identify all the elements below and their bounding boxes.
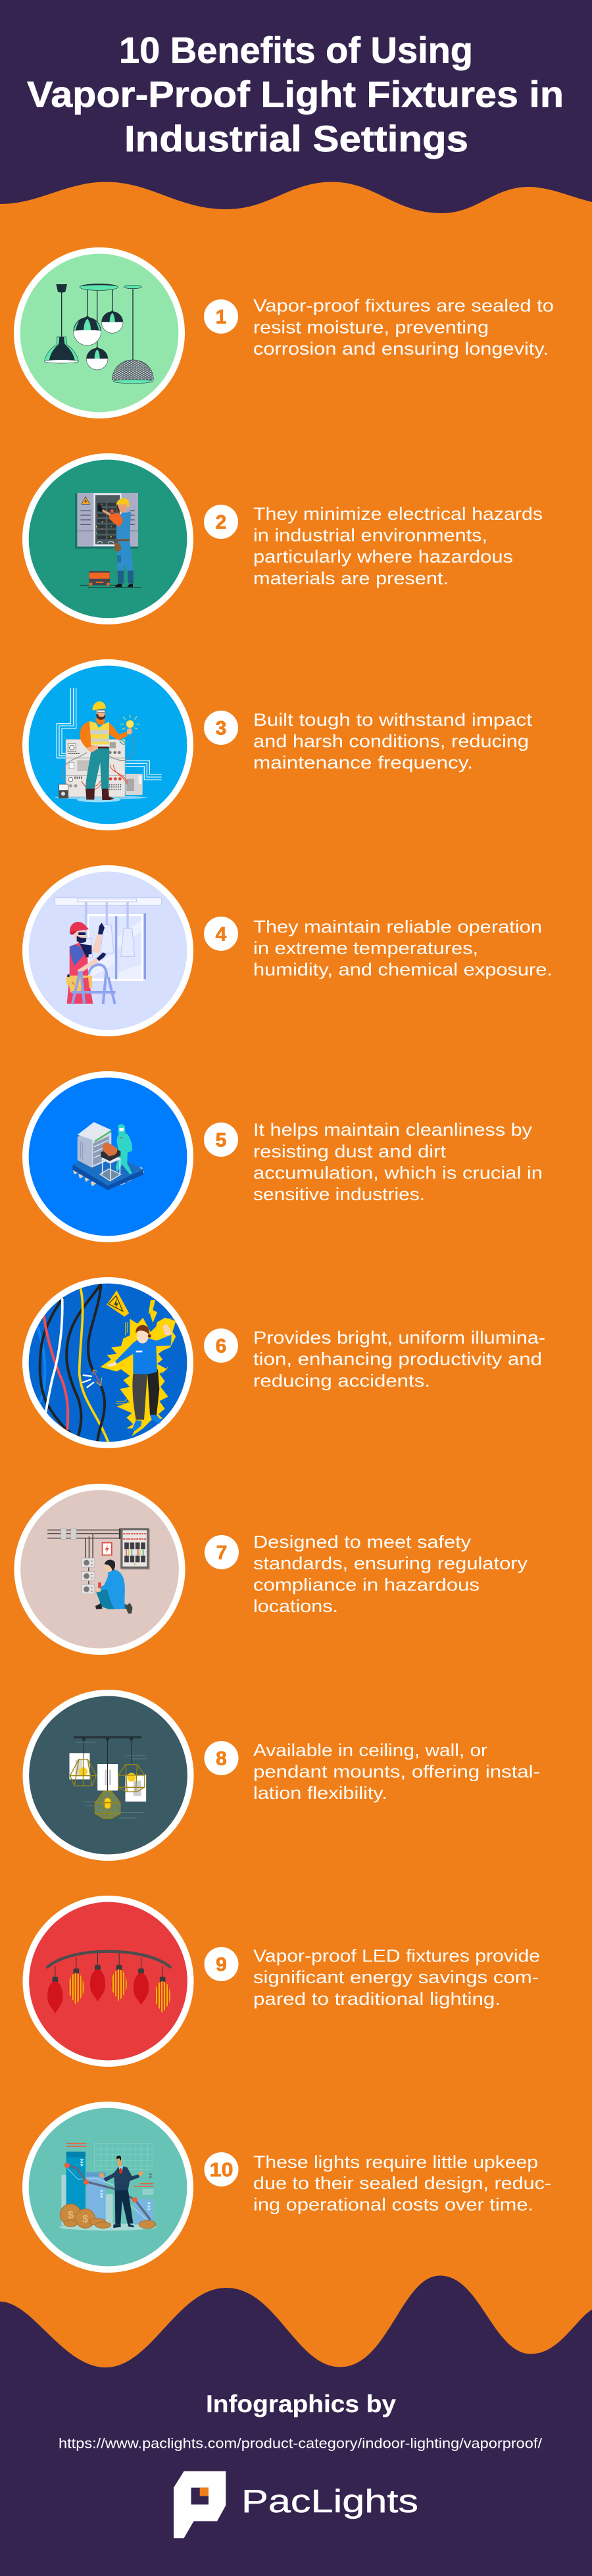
benefit text 3: maintenance frequency. — [253, 753, 473, 772]
number badge 5: 5 — [216, 1129, 226, 1151]
icon: engineer with light bulb and control cabinets — [22, 659, 193, 830]
benefit text 1: resist moisture, preventing — [253, 317, 489, 337]
benefit text 5: accumulation, which is crucial in — [253, 1163, 543, 1182]
benefit text 2: materials are present. — [253, 568, 449, 588]
panel: benefit 3 — [22, 659, 533, 830]
number badge 6: 6 — [216, 1336, 226, 1357]
benefit text 7: compliance in hazardous — [253, 1575, 480, 1595]
benefit text 8: lation flexibility. — [253, 1783, 387, 1803]
benefit text 4: They maintain reliable operation — [253, 917, 542, 936]
footer wave band — [0, 2275, 592, 2576]
title: 10 Benefits of Using — [119, 29, 473, 71]
icon: geometric cage pendant lights — [22, 1690, 193, 1861]
number badge 1 — [204, 299, 238, 334]
footer heading: Infographics by — [206, 2390, 396, 2417]
number badge 6 — [204, 1328, 238, 1363]
benefit text 9: pared to traditional lighting. — [253, 1989, 501, 2009]
icon: pendant lamps — [14, 247, 185, 418]
benefit text 7: locations. — [253, 1596, 338, 1616]
benefit text 1 — [253, 296, 554, 359]
benefit text 5 — [253, 1120, 543, 1204]
number badge 4: 4 — [216, 924, 227, 945]
number badge 3: 3 — [216, 717, 226, 740]
benefit text 8 — [253, 1740, 540, 1803]
benefit text 10: ing operational costs over time. — [253, 2195, 533, 2215]
title — [27, 29, 564, 159]
benefit text 6: reducing accidents. — [253, 1371, 430, 1390]
icon: businessman with falling cost chart and coins: $ — [82, 2213, 88, 2225]
panel: benefit 5 — [22, 1071, 543, 1242]
benefit text 4: in extreme temperatures, — [253, 938, 478, 958]
panel: benefit 2 — [22, 453, 543, 624]
title: Industrial Settings — [124, 118, 468, 159]
benefit text 2 — [253, 504, 543, 588]
benefit text 3 — [253, 710, 533, 772]
benefit text 6: tion, enhancing productivity and — [253, 1350, 542, 1369]
panel: benefit 6 — [22, 1277, 545, 1448]
benefit text 4: humidity, and chemical exposure. — [253, 959, 553, 979]
benefit text 7 — [253, 1532, 528, 1616]
benefit text 3: Built tough to withstand impact — [253, 710, 533, 730]
icon: businessman with falling cost chart and coins — [22, 2102, 193, 2273]
number badge 2: 2 — [216, 512, 226, 533]
number badge 9: 9 — [216, 1954, 227, 1975]
number badge 10 — [204, 2152, 238, 2186]
benefit text 10: due to their sealed design, reduc- — [253, 2173, 551, 2193]
source URL: https://www.paclights.com/product-category/indoor-lighting/vaporproof/ — [59, 2436, 542, 2452]
benefit text 9: significant energy savings com- — [253, 1967, 539, 1987]
panel: benefit 1 — [14, 247, 554, 418]
number badge 3 — [204, 711, 238, 745]
panel: benefit 8 — [22, 1690, 540, 1861]
header wave band — [0, 0, 592, 213]
benefit text 10 — [253, 2152, 551, 2215]
icon: businessman with falling cost chart and coins: $ — [68, 2210, 74, 2221]
benefit text 1: corrosion and ensuring longevity. — [253, 339, 549, 359]
benefit text 7: standards, ensuring regulatory — [253, 1553, 528, 1573]
icon: logo mark — [174, 2471, 226, 2538]
icon: worker installing pendant lights — [22, 865, 193, 1036]
number badge 5 — [204, 1123, 238, 1157]
benefit text 8: Available in ceiling, wall, or — [253, 1740, 487, 1760]
benefit text 3: and harsh conditions, reducing — [253, 732, 529, 751]
icon: electrician at breaker panel — [22, 453, 193, 624]
PacLights logo — [174, 2471, 418, 2538]
number badge 10: 10 — [209, 2159, 233, 2181]
panel: benefit 4 — [22, 865, 553, 1036]
number badge 1: 1 — [216, 307, 226, 328]
benefit text 2: They minimize electrical hazards — [253, 504, 543, 524]
number badge 7 — [205, 1535, 239, 1569]
benefit text 6: Provides bright, uniform illumina- — [253, 1328, 545, 1348]
benefit text 4 — [253, 917, 553, 979]
number badge 8: 8 — [216, 1748, 227, 1770]
benefit text 7: Designed to meet safety — [253, 1532, 472, 1552]
number badge 7: 7 — [216, 1542, 227, 1563]
panel: benefit 7 — [14, 1484, 528, 1655]
benefit text 1: Vapor-proof fixtures are sealed to — [253, 296, 554, 316]
benefit text 9: Vapor-proof LED fixtures provide — [253, 1946, 540, 1965]
benefit text 5: sensitive industries. — [253, 1184, 425, 1204]
benefit text 10: These lights require little upkeep — [253, 2152, 538, 2172]
benefit text 2: particularly where hazardous — [253, 547, 513, 567]
benefit text 5: It helps maintain cleanliness by — [253, 1120, 533, 1140]
icon: electric shock hazard — [22, 1277, 193, 1448]
benefit text 9 — [253, 1946, 540, 2009]
icon: string of LED bulbs — [22, 1896, 193, 2067]
panel: benefit 10 — [22, 2102, 551, 2273]
icon: cleanroom technician on chip — [22, 1071, 193, 1242]
title: Vapor-Proof Light Fixtures in — [27, 74, 564, 114]
benefit text 8: pendant mounts, offering instal- — [253, 1761, 540, 1781]
number badge 8 — [204, 1741, 238, 1775]
number badge 4 — [204, 917, 238, 951]
benefit text 6 — [253, 1328, 545, 1390]
panel: benefit 9 — [22, 1896, 540, 2067]
benefit text 2: in industrial environments, — [253, 526, 487, 545]
number badge 9 — [204, 1947, 238, 1981]
icon: electrician wiring outlets — [14, 1484, 185, 1655]
logo wordmark: PacLights — [241, 2484, 418, 2519]
number badge 2 — [204, 505, 238, 539]
benefit text 5: resisting dust and dirt — [253, 1142, 447, 1161]
